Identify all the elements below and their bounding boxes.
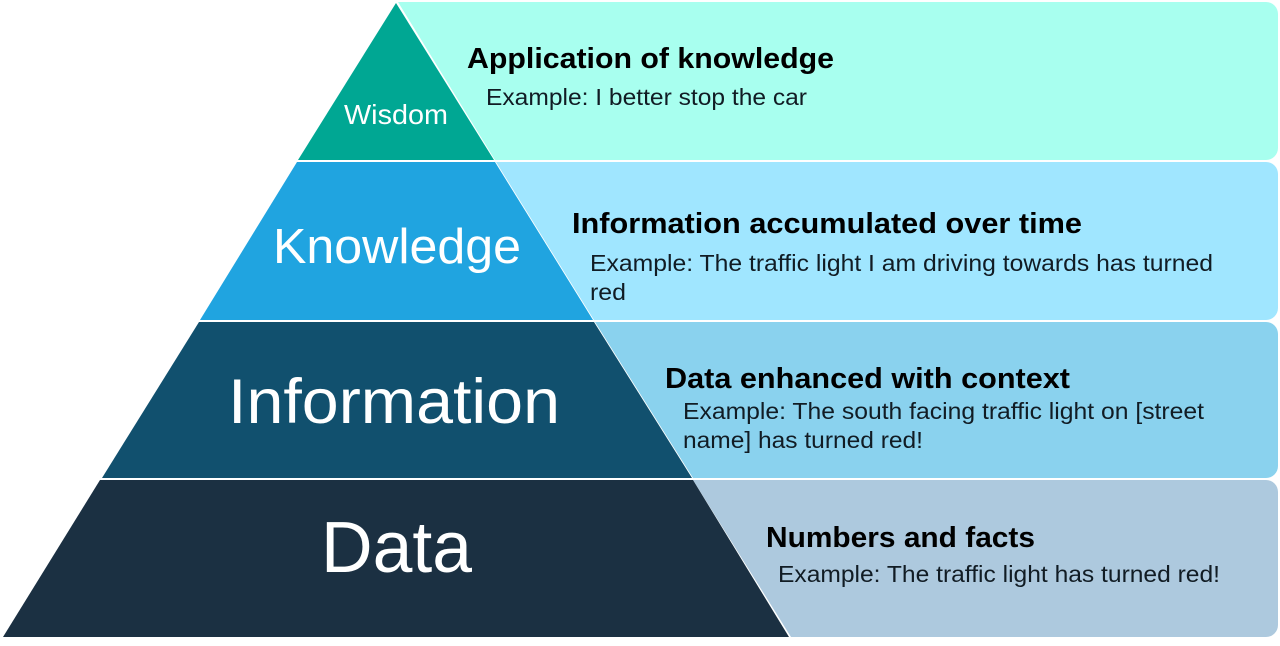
- panel: information description: [595, 322, 1278, 478]
- text: information example: Example: The south facing traffic light on [street: [683, 398, 1205, 424]
- heading: data enhanced with context: Data enhanced with context: [665, 363, 1070, 395]
- text: information example continued: name] has turned red!: [683, 427, 923, 453]
- label: data: Data: [321, 508, 473, 588]
- panel: data description: [693, 480, 1278, 637]
- heading: application of knowledge: Application of knowledge: [467, 43, 834, 75]
- text: wisdom example: Example: I better stop the car: [486, 84, 807, 110]
- panel: knowledge description: [496, 162, 1278, 320]
- label: information: Information: [228, 367, 560, 437]
- text: knowledge example continued: red: [590, 279, 626, 305]
- heading: information accumulated over time: Information accumulated over time: [572, 208, 1082, 240]
- pyramid tier: data: [3, 480, 789, 637]
- label: knowledge: Knowledge: [273, 220, 521, 274]
- pyramid tier: wisdom: [298, 3, 494, 160]
- pyramid tier: knowledge: [200, 162, 593, 320]
- panel: wisdom description: [398, 2, 1278, 160]
- pyramid tier: information: [102, 322, 692, 478]
- heading: numbers and facts: Numbers and facts: [766, 522, 1035, 554]
- label: wisdom: Wisdom: [344, 99, 448, 130]
- text: data example: Example: The traffic light has turned red!: [778, 561, 1220, 587]
- text: knowledge example: Example: The traffic light I am driving towards has turned: [590, 250, 1213, 276]
